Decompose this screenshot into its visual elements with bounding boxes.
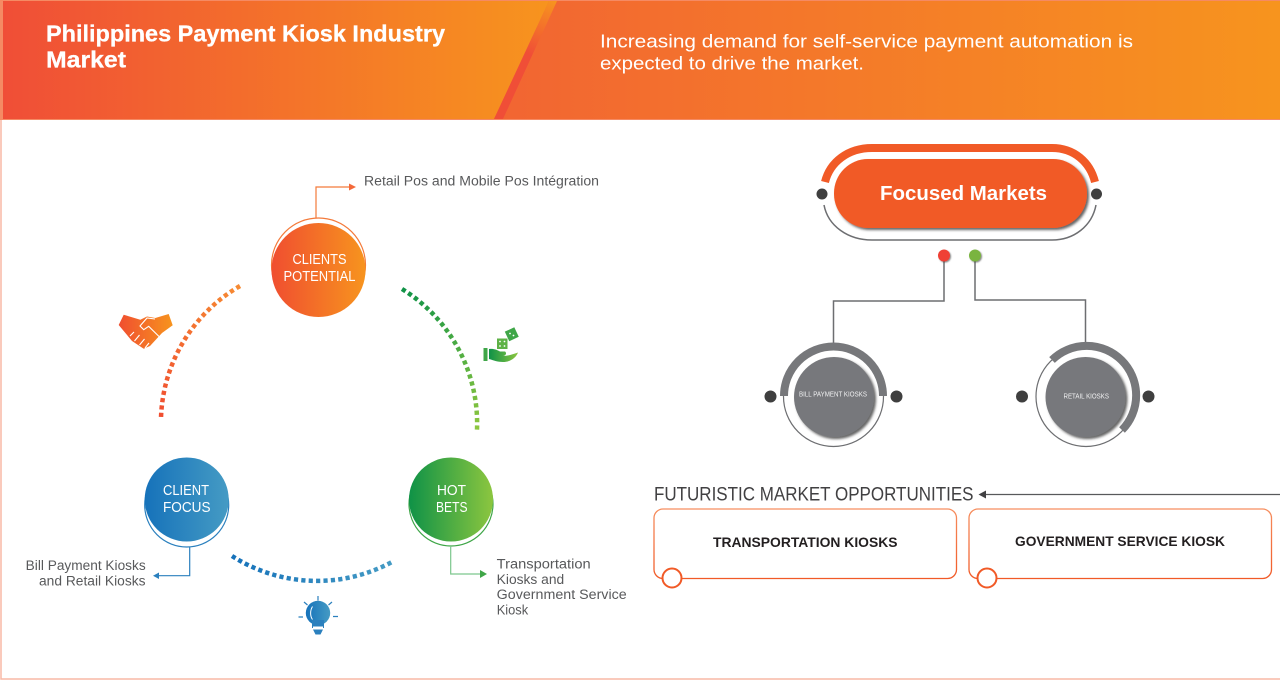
icon: hand with dice — [484, 327, 519, 362]
blue dotted arc — [232, 556, 392, 581]
header subtitle: Increasing demand for self-service payment automation is — [600, 30, 1133, 52]
card: transportation kiosks — [654, 509, 956, 588]
node: client focus: FOCUS — [163, 499, 210, 516]
connector: client focus — [153, 547, 190, 579]
icon: light bulb — [298, 596, 338, 634]
header left panel — [3, 1, 549, 119]
label: hot bets detail: Kiosks and — [497, 572, 564, 587]
card: government service kiosk — [969, 509, 1272, 588]
label: retail pos: Retail Pos and Mobile Pos Intégration — [364, 174, 599, 188]
red node dot — [938, 250, 950, 262]
node: hot bets: HOT — [437, 482, 466, 499]
node: clients potential — [272, 218, 366, 317]
title: Philippines Payment Kiosk Industry — [46, 20, 445, 46]
node: client focus: CLIENT — [163, 482, 209, 499]
header diagonal stripe — [494, 1, 557, 119]
pill bottom arc — [824, 205, 1096, 240]
connector: hot bets — [451, 546, 487, 578]
node: bill payment kiosks — [764, 346, 902, 446]
node: bill payment kiosks: BILL PAYMENT KIOSKS — [799, 390, 867, 398]
node: hot bets: BETS — [436, 499, 468, 516]
pill top arc — [825, 148, 1095, 182]
focused markets pill — [816, 148, 1102, 240]
card: transportation kiosks: TRANSPORTATION KIOSKS — [713, 534, 898, 550]
connector: green to retail — [975, 261, 1086, 343]
arrow: opportunities — [978, 490, 1280, 498]
icon: handshake — [119, 314, 173, 349]
node: retail kiosks — [1016, 346, 1154, 446]
card: government service kiosk: GOVERNMENT SERVICE KIOSK — [1015, 533, 1225, 549]
label: client focus detail: and Retail Kiosks — [39, 574, 146, 588]
title: Market — [46, 46, 126, 72]
node: clients potential: CLIENTS — [292, 251, 346, 268]
node: retail kiosks: RETAIL KIOSKS — [1064, 392, 1109, 400]
node: client focus — [145, 458, 229, 547]
header banner — [0, 0, 1280, 120]
connector: clients potential — [316, 184, 356, 218]
header subtitle: expected to drive the market. — [600, 52, 864, 74]
node: clients potential: POTENTIAL — [284, 268, 356, 285]
green node dot — [969, 250, 981, 262]
pill label: Focused Markets — [880, 183, 1047, 205]
label: hot bets detail: Transportation — [497, 556, 591, 572]
label: client focus detail: Bill Payment Kiosks — [26, 558, 146, 573]
label: hot bets detail: Kiosk — [497, 602, 528, 618]
connector: red to bill payment — [834, 261, 944, 343]
node: hot bets — [409, 458, 493, 546]
green dotted arc — [402, 289, 477, 430]
heading: futuristic market opportunities: FUTURISTIC MARKET OPPORTUNITIES — [654, 484, 974, 506]
label: hot bets detail: Government Service — [497, 587, 627, 602]
orange dotted arc — [161, 286, 240, 418]
